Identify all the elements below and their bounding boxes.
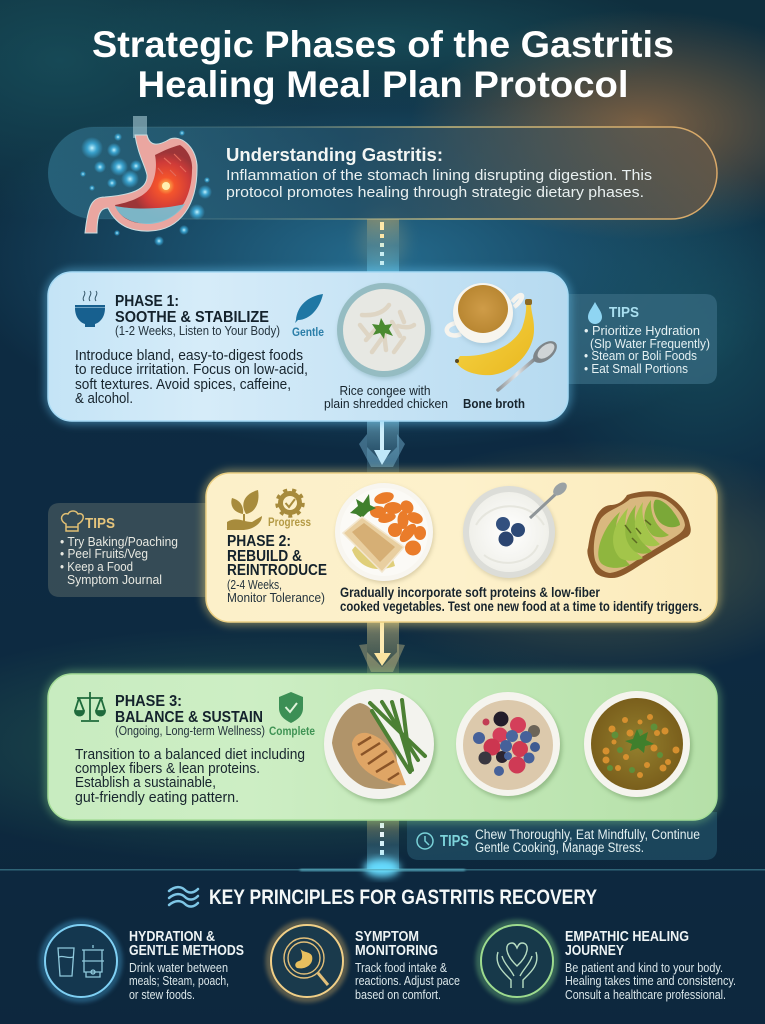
tips list phase 2: • Peel Fruits/Veg bbox=[60, 546, 148, 561]
text: understanding gastritis: Understanding Gastritis: bbox=[226, 145, 443, 165]
phase 1 description bbox=[75, 348, 308, 407]
icon: bowl bbox=[75, 291, 105, 327]
phase 2 heading: REINTRODUCE bbox=[227, 562, 327, 579]
icon: progress gear bbox=[268, 490, 311, 529]
text: symptom monitoring: based on comfort. bbox=[355, 987, 441, 1002]
icon: water drop bbox=[588, 302, 602, 324]
icon: progress gear: Progress bbox=[268, 515, 311, 529]
text: symptom monitoring: MONITORING bbox=[355, 943, 438, 959]
intro panel: understanding gastritis bbox=[48, 116, 717, 246]
panel: key principles bbox=[43, 886, 736, 1002]
text: understanding gastritis: Inflammation of the stomach lining disrupting digestion. This bbox=[226, 167, 652, 184]
icon: heart in hands bbox=[479, 923, 555, 999]
arrow: phase 1 to phase 2 bbox=[359, 421, 405, 473]
phase 2 description: Gradually incorporate soft proteins & low-fiber bbox=[340, 585, 601, 600]
panel: tips phase 1 bbox=[560, 294, 717, 384]
tips list phase 2: Symptom Journal bbox=[67, 572, 162, 587]
principle: symptom monitoring bbox=[269, 923, 460, 1002]
food: yogurt with blueberries bbox=[463, 480, 569, 580]
icon: chef hat bbox=[62, 511, 83, 531]
phase 1 description: to reduce irritation. Focus on low-acid, bbox=[75, 362, 308, 378]
text: hydration: HYDRATION & bbox=[129, 929, 215, 945]
phase 1 heading: PHASE 1: bbox=[115, 293, 179, 310]
tips list phase 1: (Slp Water Frequently) bbox=[590, 336, 710, 351]
text: symptom monitoring bbox=[355, 929, 460, 1002]
tips text phase 3 bbox=[440, 827, 700, 855]
panel: phase 2 card bbox=[202, 469, 721, 626]
phase 3 description: Transition to a balanced diet including bbox=[75, 747, 305, 763]
icon: clock bbox=[417, 833, 433, 849]
food: fish and carrots bbox=[335, 483, 434, 583]
phase 2 description: cooked vegetables. Test one new food at a time to identify triggers. bbox=[340, 599, 702, 614]
phase 2 heading bbox=[227, 533, 327, 605]
tips list phase 1 bbox=[584, 304, 710, 376]
phase 3 heading: PHASE 3: bbox=[115, 693, 182, 710]
text: hydration: meals; Steam, poach, bbox=[129, 973, 229, 988]
phase 1 heading: SOOTHE & STABILIZE bbox=[115, 309, 269, 326]
text: symptom monitoring: SYMPTOM bbox=[355, 929, 419, 945]
food: avocado toast bbox=[587, 491, 691, 578]
tips list phase 1: TIPS bbox=[609, 304, 639, 321]
food: lentil soup bbox=[584, 691, 692, 800]
title bbox=[92, 24, 674, 105]
icon: complete shield bbox=[269, 692, 315, 738]
food: bone broth bbox=[447, 283, 522, 346]
icon: stomach bbox=[80, 116, 212, 246]
food captions: plain shredded chicken bbox=[324, 397, 448, 411]
tips list phase 2: TIPS bbox=[85, 515, 115, 532]
heading: key principles: KEY PRINCIPLES FOR GASTRITIS RECOVERY bbox=[209, 886, 597, 909]
icon: balance scales bbox=[75, 692, 105, 721]
text: understanding gastritis bbox=[226, 145, 652, 201]
food: banana bbox=[455, 299, 534, 375]
phase 1 description: Introduce bland, easy-to-digest foods bbox=[75, 348, 303, 364]
food captions: Bone broth bbox=[463, 397, 525, 411]
food captions bbox=[324, 384, 525, 411]
text: hydration: Drink water between bbox=[129, 960, 228, 975]
food captions: Rice congee with bbox=[340, 384, 431, 398]
tips list phase 1: • Eat Small Portions bbox=[584, 361, 688, 376]
phase 2 heading: (2-4 Weeks, bbox=[227, 577, 282, 592]
food: rice congee with chicken bbox=[337, 283, 432, 379]
phase 3 heading: (Ongoing, Long-term Wellness) bbox=[115, 724, 265, 738]
connector: intro to phase 1 bbox=[358, 212, 406, 272]
tips list phase 2 bbox=[60, 515, 178, 587]
text: hydration bbox=[129, 929, 244, 1002]
food: grilled chicken with quinoa and asparagus bbox=[324, 689, 436, 802]
panel: tips phase 3 bbox=[407, 812, 717, 860]
text: understanding gastritis: protocol promotes healing through strategic dietary phases. bbox=[226, 184, 644, 201]
tips text phase 3: Chew Thoroughly, Eat Mindfully, Continue bbox=[475, 827, 700, 842]
phase 3 description bbox=[75, 747, 305, 806]
panel: tips phase 2 bbox=[48, 503, 216, 597]
principle: empathic healing journey bbox=[479, 923, 736, 1002]
phase 2 heading: PHASE 2: bbox=[227, 533, 291, 550]
text: empathic healing journey: JOURNEY bbox=[565, 943, 624, 959]
text: empathic healing journey: Consult a healthcare professional. bbox=[565, 987, 726, 1002]
text: symptom monitoring: Track food intake & bbox=[355, 960, 447, 975]
phase 2 heading: Monitor Tolerance) bbox=[227, 590, 325, 605]
food: spoon bbox=[498, 337, 561, 390]
tips text phase 3: TIPS bbox=[440, 833, 469, 850]
tips text phase 3: Gentle Cooking, Manage Stress. bbox=[475, 840, 644, 855]
icon: glass and steamer bbox=[43, 923, 119, 999]
icon: feather gentle bbox=[292, 294, 324, 339]
panel: phase 1 card bbox=[44, 268, 572, 425]
icon: complete shield: Complete bbox=[269, 724, 315, 738]
phase 1 description: & alcohol. bbox=[75, 391, 133, 407]
tips list phase 1: • Steam or Boli Foods bbox=[584, 348, 697, 363]
phase 3 description: Establish a sustainable, bbox=[75, 775, 216, 791]
icon: magnifier over stomach bbox=[269, 923, 345, 999]
tips list phase 2: • Try Baking/Poaching bbox=[60, 534, 178, 549]
tips list phase 1: • Prioritize Hydration bbox=[584, 323, 700, 338]
icon: feather gentle: Gentle bbox=[292, 325, 324, 339]
connector: phase 3 to key principles bbox=[364, 820, 400, 877]
text: empathic healing journey bbox=[565, 929, 736, 1002]
phase 3 heading bbox=[115, 693, 265, 738]
icon: sprout in hand bbox=[227, 490, 262, 530]
text: empathic healing journey: EMPATHIC HEALING bbox=[565, 929, 689, 945]
title: Strategic Phases of the Gastritis bbox=[92, 24, 674, 65]
phase 3 description: complex fibers & lean proteins. bbox=[75, 761, 260, 777]
phase 2 heading: REBUILD & bbox=[227, 548, 302, 565]
text: hydration: GENTLE METHODS bbox=[129, 943, 244, 959]
phase 2 description bbox=[340, 585, 702, 614]
phase 1 heading bbox=[115, 293, 280, 338]
food: oatmeal with berries bbox=[456, 692, 562, 799]
phase 3 description: gut-friendly eating pattern. bbox=[75, 790, 239, 806]
text: empathic healing journey: Be patient and kind to your body. bbox=[565, 960, 723, 975]
tips list phase 2: • Keep a Food bbox=[60, 559, 133, 574]
phase 1 description: soft textures. Avoid spices, caffeine, bbox=[75, 377, 291, 393]
text: symptom monitoring: reactions. Adjust pace bbox=[355, 973, 460, 988]
panel: phase 3 card bbox=[44, 670, 721, 824]
text: hydration: or stew foods. bbox=[129, 987, 195, 1002]
icon: waves bbox=[169, 887, 198, 907]
arrow: phase 2 to phase 3 bbox=[359, 622, 405, 674]
principle: hydration and gentle methods bbox=[43, 923, 244, 1002]
phase 3 heading: BALANCE & SUSTAIN bbox=[115, 709, 263, 726]
divider line bbox=[0, 869, 765, 871]
title: Healing Meal Plan Protocol bbox=[138, 64, 628, 105]
phase 1 heading: (1-2 Weeks, Listen to Your Body) bbox=[115, 323, 280, 338]
